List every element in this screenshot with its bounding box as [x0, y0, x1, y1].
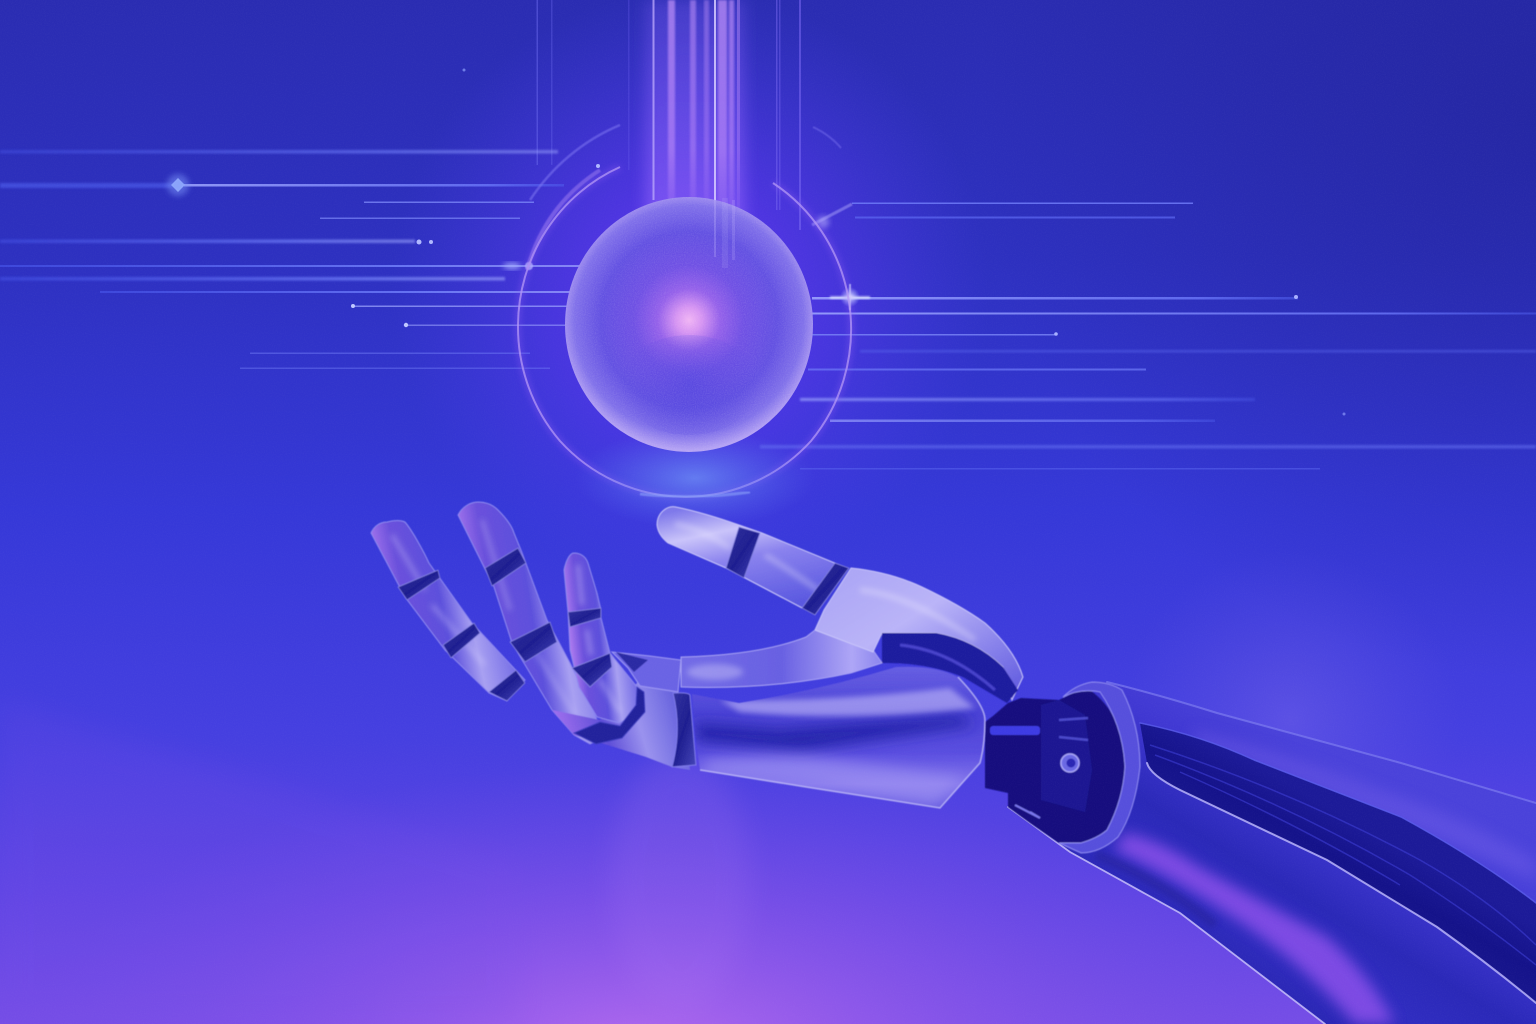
frill highlight — [1015, 805, 1040, 818]
channel grooves — [1150, 745, 1536, 965]
robotic forearm — [1008, 682, 1536, 1024]
arm shell — [1008, 682, 1536, 1024]
palm dark blob — [695, 715, 975, 752]
palm edge lines — [700, 677, 985, 808]
wrist cylinder highlight — [990, 726, 1040, 735]
glow below orb — [575, 428, 815, 528]
socket ring — [1059, 682, 1140, 853]
lower stripe — [1096, 855, 1215, 925]
wrist connector — [612, 652, 681, 692]
orbit rings around orb — [518, 125, 851, 497]
palm top highlight — [720, 688, 975, 716]
upper highlight — [1190, 730, 1536, 880]
light edges — [1008, 682, 1536, 1024]
palm band — [672, 693, 696, 767]
small node dots and lens flares — [167, 68, 1346, 416]
knuckle dark band — [574, 687, 645, 744]
nut ridges — [1059, 718, 1088, 740]
dark inner cavity — [882, 633, 1018, 703]
left finger — [371, 520, 525, 701]
nut — [1041, 700, 1092, 812]
palm lower — [692, 666, 985, 808]
palm lower highlight — [705, 755, 965, 806]
wrist joint — [985, 682, 1140, 853]
dark collar mass — [985, 690, 1126, 852]
thumb — [657, 507, 849, 615]
second finger — [458, 502, 620, 744]
third finger — [564, 553, 641, 723]
dark channel — [1140, 723, 1536, 1003]
knuckle connector — [552, 680, 690, 770]
purple highlight — [1115, 833, 1395, 1024]
thumb web — [681, 630, 882, 687]
glowing orb — [560, 190, 820, 460]
horizontal light lines, left — [0, 150, 580, 369]
vertical light beams above orb — [536, 0, 801, 240]
bolt — [1061, 754, 1079, 772]
thumb base shell — [815, 568, 1023, 700]
robotic hand — [371, 502, 1023, 815]
horizontal light lines, right — [760, 202, 1536, 470]
